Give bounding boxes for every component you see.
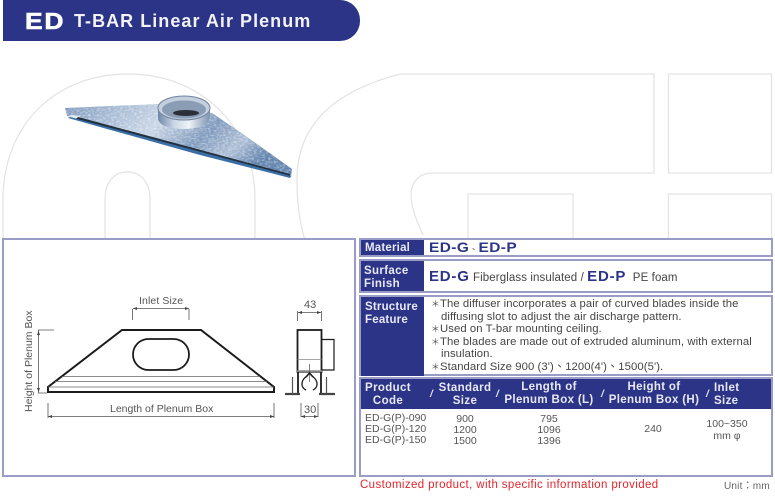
dimension labels: Height of Plenum Box xyxy=(23,310,35,412)
table body xyxy=(365,412,426,446)
table header: Plenum Box (L) xyxy=(504,394,594,406)
feature list: The diffuser incorporates a pair of curved blades inside the xyxy=(440,298,738,310)
table body: ED-G(P)-150 xyxy=(365,434,426,446)
product photo: linear air plenum xyxy=(65,96,292,178)
dimension labels: Inlet Size xyxy=(139,295,183,307)
table header: / xyxy=(706,389,709,400)
specification table xyxy=(359,377,773,477)
row: structure feature xyxy=(359,295,773,376)
table header: Inlet xyxy=(714,382,739,394)
structure feature label xyxy=(361,297,424,376)
dimension labels xyxy=(23,295,316,416)
feature list: ＊ xyxy=(431,362,440,372)
title code: ED xyxy=(25,8,65,34)
specification table: 900 xyxy=(456,413,474,425)
title text: T-BAR Linear Air Plenum xyxy=(74,11,311,31)
table header: Plenum Box (H) xyxy=(609,394,699,406)
row: surface finish xyxy=(359,259,773,293)
panel: drawing xyxy=(2,238,356,477)
table header: / xyxy=(496,389,499,400)
table header: / xyxy=(601,389,604,400)
specification table: mm φ xyxy=(713,430,741,442)
specification table: 1396 xyxy=(537,435,561,447)
row: material xyxy=(359,238,773,257)
feature list: ＊ xyxy=(431,337,440,347)
table header: Product xyxy=(365,382,411,394)
specification table: 240 xyxy=(644,423,662,435)
feature list: Used on T-bar mounting ceiling. xyxy=(440,323,602,335)
specification table: 1096 xyxy=(537,424,561,436)
specification table: 100~350 xyxy=(706,418,748,430)
dimension lines xyxy=(38,308,322,418)
table header xyxy=(361,379,771,409)
customized product note: Customized product, with specific information provided xyxy=(360,479,659,491)
surface finish label: Surface xyxy=(364,265,409,277)
material label: Material xyxy=(365,242,410,254)
table header: Size xyxy=(453,395,477,407)
feature list: ＊ xyxy=(431,324,440,334)
side view section xyxy=(285,330,335,394)
surface finish label: Finish xyxy=(364,278,400,290)
feature list xyxy=(431,298,752,373)
table header: Code xyxy=(373,395,403,407)
surface finish value: ED-G Fiberglass insulated / ED-P PE foam xyxy=(429,268,678,285)
structure feature label: Feature xyxy=(365,314,408,326)
table header: Length of xyxy=(521,381,577,393)
material label xyxy=(361,240,424,255)
feature list: ＊ xyxy=(431,299,440,309)
table header: Height of xyxy=(628,381,680,393)
specification table: 1500 xyxy=(453,435,477,447)
unit note: Unit：mm xyxy=(724,481,770,492)
title bar xyxy=(3,0,360,41)
table header: / xyxy=(430,389,433,400)
surface finish label xyxy=(361,261,424,291)
material value: ED-G、ED-P xyxy=(429,239,517,255)
dimension labels: 43 xyxy=(304,299,316,311)
dimension labels: Length of Plenum Box xyxy=(110,403,214,415)
feature list: Standard Size 900 (3')、1200(4')、1500(5'). xyxy=(440,361,663,373)
table body: ED-G(P)-120 xyxy=(365,423,426,435)
specification table: 795 xyxy=(540,413,558,425)
dimension labels: 30 xyxy=(304,404,316,416)
feature list: insulation. xyxy=(441,348,493,360)
table header: Size xyxy=(714,395,738,407)
table header: Standard xyxy=(439,382,491,394)
table body: ED-G(P)-090 xyxy=(365,412,426,424)
feature list: The blades are made out of extruded aluminum, with external xyxy=(440,336,752,348)
specification table: 1200 xyxy=(453,424,477,436)
structure feature label: Structure xyxy=(365,301,418,313)
front view plenum xyxy=(48,330,274,392)
feature list: diffusing slot to adjust the air discharge pattern. xyxy=(441,311,682,323)
